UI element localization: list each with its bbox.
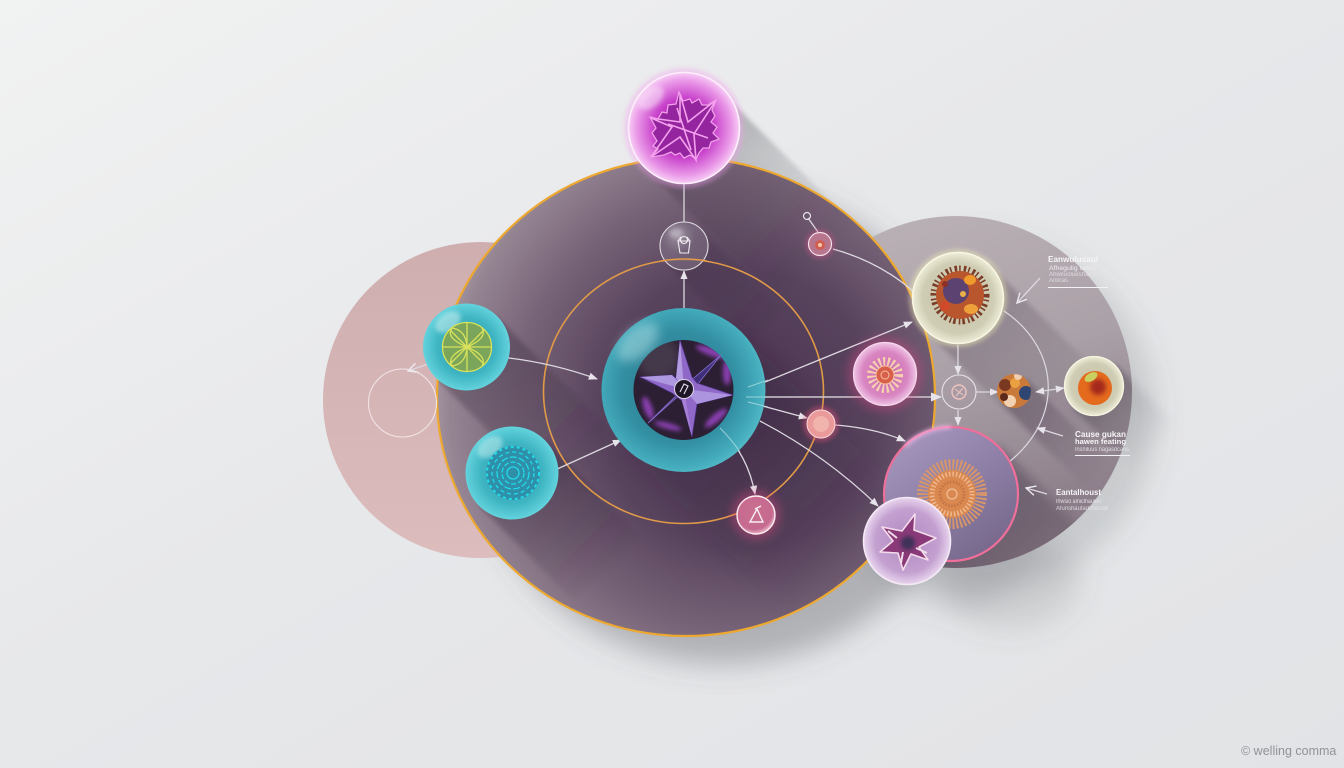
- text block: middle annotation: Cause gukan: [1075, 429, 1126, 439]
- node: pale sphere with orange cell: [909, 249, 1007, 347]
- node: top magenta sphere: [624, 68, 744, 188]
- text block: lower annotation: Ihwsio alniclhaulen: [1056, 499, 1101, 505]
- panel: big orbit circle: [436, 160, 936, 638]
- text block: lower annotation: Eantalhoust: [1056, 487, 1101, 497]
- text block: top annotation: Anlicas: [1049, 278, 1068, 284]
- watermark: © welling comma: [1241, 744, 1336, 758]
- text block: lower annotation: [1056, 487, 1108, 512]
- shadows on background: [473, 186, 1156, 664]
- small node at line start: [804, 212, 810, 220]
- node: purple flower sphere: [864, 498, 950, 584]
- node: outlined small circle with rose icon: [942, 375, 976, 409]
- orbit passing over small circle: [661, 259, 707, 261]
- node: small pale sphere with orange core: [1064, 356, 1124, 416]
- node: small outlined glass circle with icon: [660, 222, 708, 270]
- icon: jagged magenta star: [650, 92, 719, 160]
- text block: top annotation: Eanwulusaul: [1048, 254, 1098, 264]
- magenta sphere shadow: [647, 91, 862, 306]
- text block: middle annotation: [1075, 429, 1130, 456]
- panel: right grey circle: [872, 216, 1132, 568]
- outline circle on left panel: [368, 369, 436, 437]
- panel: left pink circle: [323, 242, 639, 558]
- lines over center sphere: [720, 380, 768, 452]
- icon: large orange sun: [923, 465, 981, 523]
- node: small pink center right: [803, 406, 839, 442]
- text block: top annotation: Ahwiluolueshaliguhes: [1049, 272, 1108, 278]
- node: teal sphere with green cell: [423, 304, 510, 390]
- dark star core: [634, 336, 734, 440]
- inner orange orbit: [544, 260, 824, 524]
- connector lines and arrows: [408, 184, 1064, 506]
- node: orange textured circle: [997, 374, 1031, 408]
- node: small pink top right: [805, 229, 835, 259]
- icon: flower: [880, 514, 936, 570]
- text block: middle annotation: hawen feating: [1075, 439, 1126, 446]
- text block: middle annotation: Inshiluus nagasdcans: [1075, 447, 1129, 453]
- node: large lavender sphere with sun: [884, 427, 1018, 561]
- text block: top annotation: [1048, 254, 1108, 288]
- node: pink bottom sphere with triangle icon: [732, 491, 780, 539]
- icon: triangle: [750, 506, 763, 522]
- node: teal sphere with blue cell: [466, 426, 558, 520]
- icon: sun: [872, 362, 898, 388]
- text block: lower annotation: Afunshautadilhautat: [1056, 506, 1108, 512]
- right sphere shadow beyond circle: [1073, 365, 1179, 471]
- icon: small cup: [678, 236, 690, 253]
- icon: orange spiky cell: [934, 269, 986, 321]
- diagonal star arms: [648, 355, 721, 423]
- node: pink sphere with sun: [848, 337, 922, 411]
- node: central teal sphere: [602, 308, 766, 472]
- star center badge: [674, 380, 694, 398]
- text block: top annotation: Afhegulig lawer: [1049, 265, 1097, 272]
